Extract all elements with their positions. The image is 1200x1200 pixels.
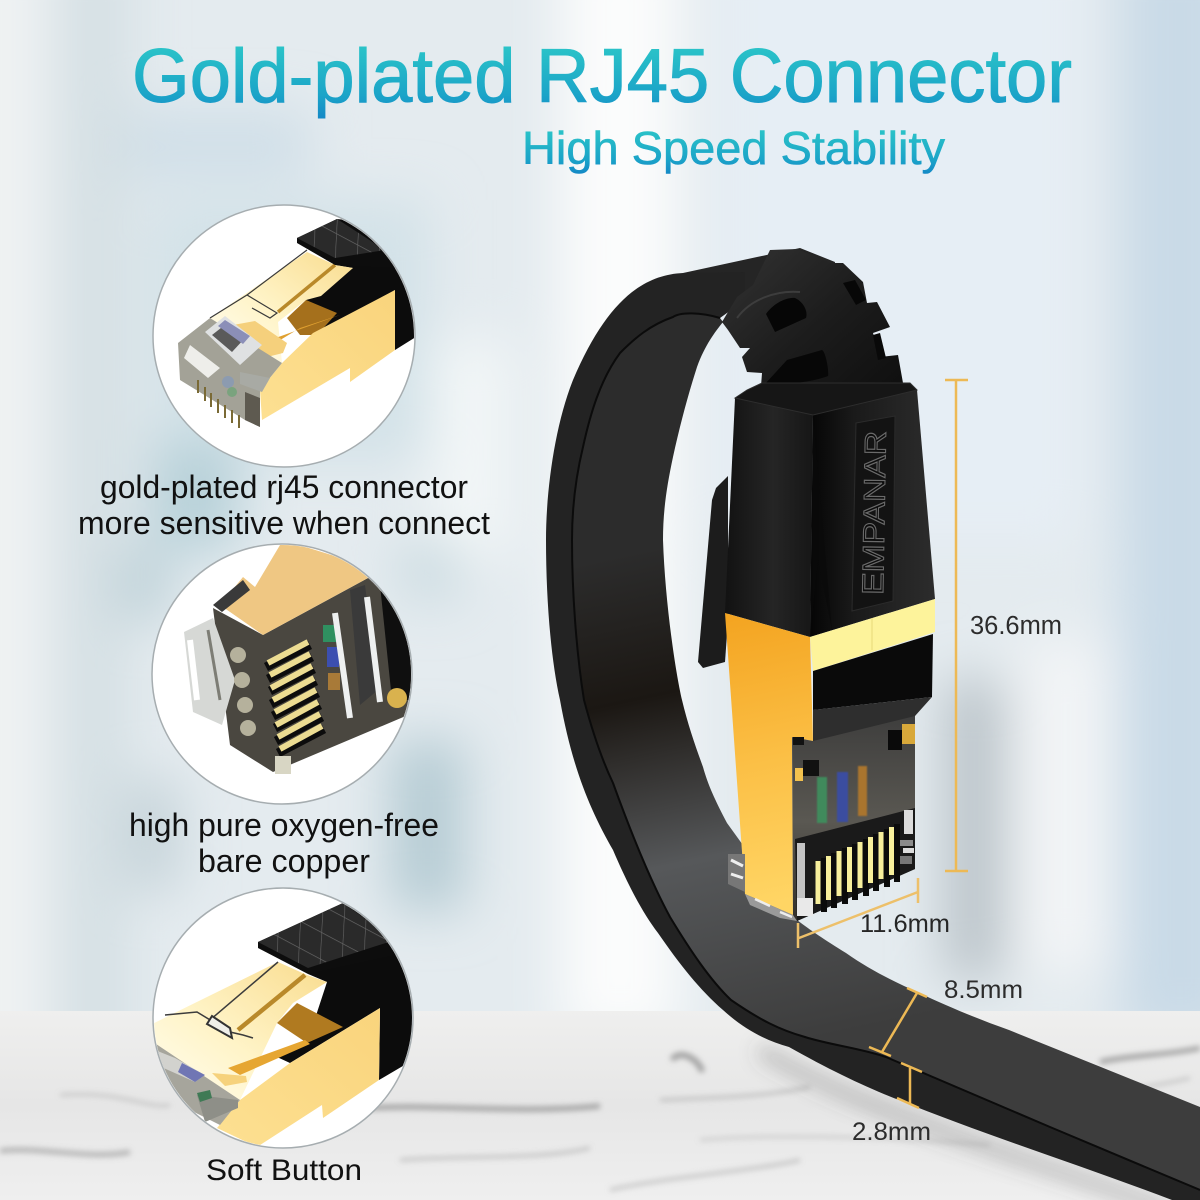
dimension: 8.5mm: 8.5mm [944, 976, 1023, 1004]
caption 3: Soft Button [206, 1154, 362, 1187]
contact area [795, 808, 915, 921]
boot facet [810, 415, 832, 637]
caption 2: high pure oxygen-free [129, 807, 439, 843]
plug clip right [888, 724, 915, 750]
plug clip left [793, 737, 819, 781]
plug front [156, 1044, 240, 1125]
caption 1: more sensitive when connect [78, 505, 490, 541]
gold top [226, 545, 368, 635]
wire colours [323, 625, 340, 690]
black rear housing [306, 219, 414, 350]
subtitle: High Speed Stability [522, 122, 945, 174]
gold side [217, 1008, 380, 1147]
shield outline [165, 962, 278, 1038]
dimension: 8.5mm [869, 976, 1023, 1056]
copper pins [266, 642, 324, 753]
gold tab [233, 321, 287, 357]
flat ethernet cable [546, 248, 1200, 1200]
pale shield top [210, 252, 353, 363]
circle 1: gold-plated connector [153, 205, 440, 467]
gold tab [212, 1073, 247, 1086]
clear latch [184, 580, 250, 725]
strain relief boot [722, 249, 903, 410]
boot collar [735, 383, 917, 415]
left shield tab [728, 854, 797, 921]
release button with hatch [258, 904, 396, 974]
pale shield top [140, 962, 327, 1100]
cable side face [546, 272, 1200, 1200]
cavity [277, 1003, 343, 1043]
cable shadow [760, 1050, 1170, 1200]
boot left face [725, 398, 813, 637]
black rear housing [278, 904, 412, 1080]
title: Gold-plated RJ45 Connector [132, 34, 1072, 119]
dimension: 36.6mm [945, 380, 1062, 871]
copper contact pads [230, 647, 256, 736]
caption 1 [78, 469, 490, 541]
brand text: EMPANAR [857, 431, 893, 595]
bottom corner [275, 756, 291, 774]
caption 1: gold-plated rj45 connector [100, 469, 468, 505]
caption 2 [129, 807, 439, 879]
transparent plug body [792, 700, 915, 921]
dimension: 2.8mm: 2.8mm [852, 1118, 931, 1146]
marble table [0, 1011, 1200, 1200]
white contact details [797, 810, 914, 916]
connector window [813, 634, 933, 710]
RJ45 connector [698, 249, 935, 921]
circle 2: oxygen-free copper [152, 540, 420, 804]
dimension: 2.8mm [852, 1063, 931, 1146]
cavity [287, 300, 337, 335]
plug front [178, 316, 282, 428]
gold shield band [810, 599, 935, 671]
dimension: 36.6mm: 36.6mm [970, 612, 1062, 640]
cable top face [572, 313, 1200, 1190]
gold clip [387, 688, 407, 708]
latch [698, 476, 728, 668]
cable back band [683, 248, 835, 310]
coloured wires [817, 766, 867, 823]
release button [297, 219, 395, 268]
gold pins [818, 824, 897, 912]
circle 3: soft button [140, 888, 430, 1148]
gold strip [278, 265, 335, 312]
dimension: 11.6mm [798, 878, 950, 948]
caption 2: bare copper [198, 843, 370, 879]
boot right face [810, 390, 935, 637]
dark plug body [213, 578, 420, 772]
gold shield side [725, 613, 813, 915]
gold side [260, 290, 395, 420]
white dividers [335, 597, 380, 718]
gold strip [238, 975, 305, 1030]
dimension: 11.6mm: 11.6mm [860, 910, 950, 938]
cable seam line [572, 313, 1200, 1190]
shield outline [210, 250, 307, 318]
brand plate [852, 416, 895, 611]
